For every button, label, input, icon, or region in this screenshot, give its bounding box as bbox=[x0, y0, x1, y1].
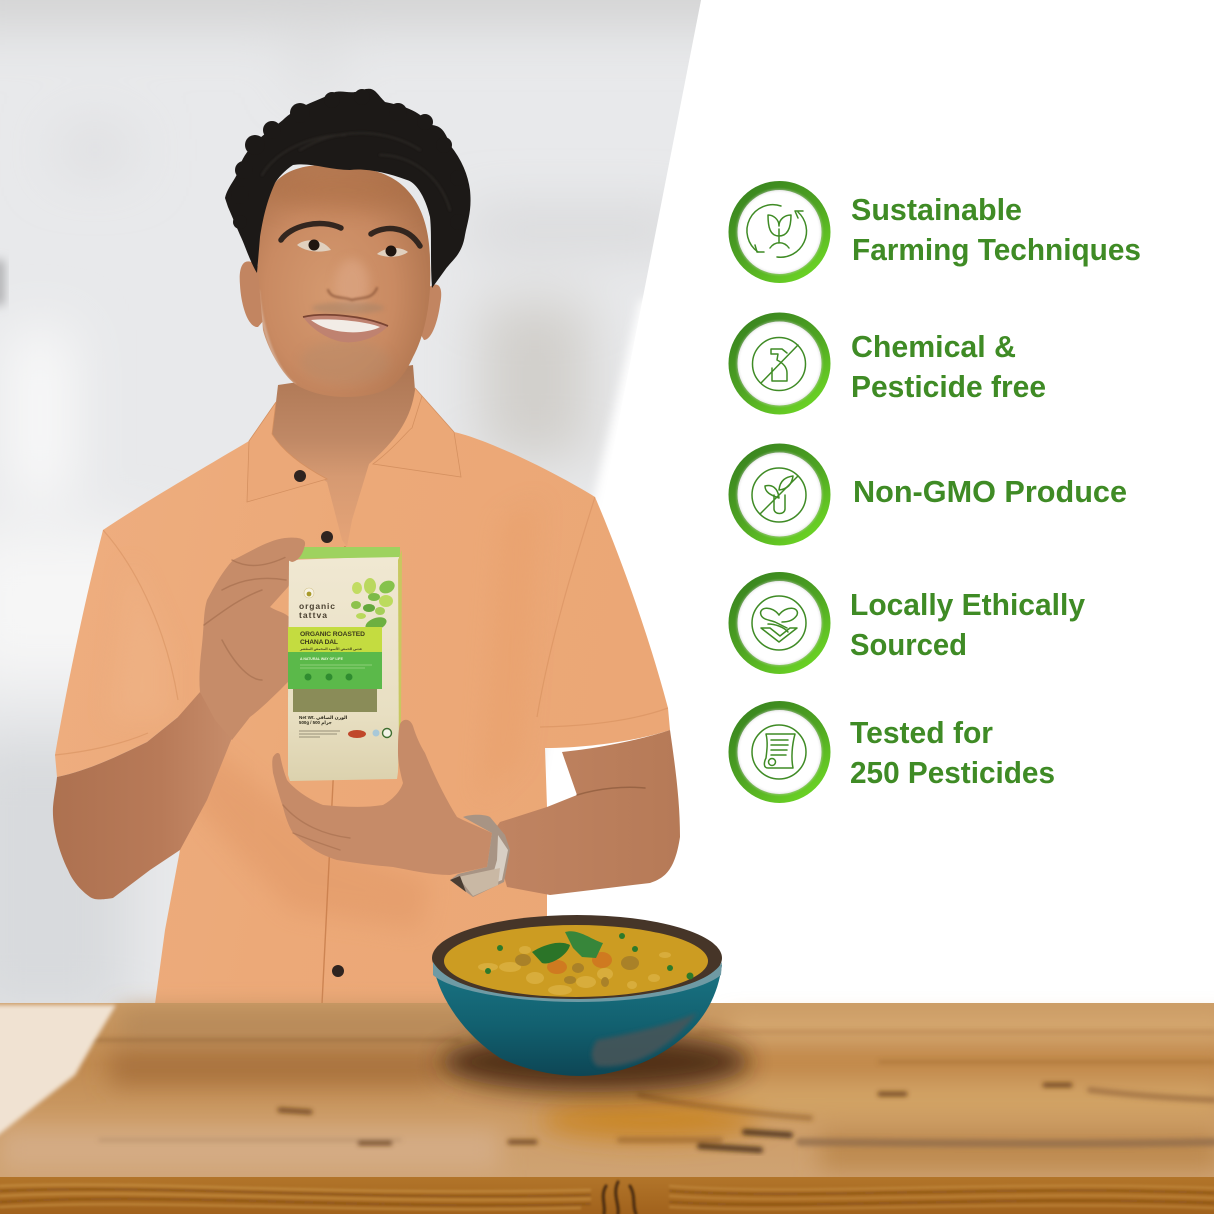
collar and placket buttons bbox=[294, 470, 344, 977]
coriander garnish bbox=[485, 931, 694, 980]
lentils bbox=[478, 946, 671, 995]
dal bowl bbox=[432, 915, 750, 1092]
green tagline band bbox=[288, 652, 382, 689]
product package: Organic Tattva Roasted Chana Dal bbox=[288, 547, 402, 781]
title band: عدس الحمص الأسود المحمص المقشر bbox=[299, 646, 362, 651]
label: Tested for bbox=[850, 715, 993, 750]
net weight text bbox=[299, 715, 348, 737]
table bright patch bbox=[0, 1005, 116, 1140]
title band: ORGANIC ROASTED bbox=[300, 631, 365, 638]
ears bbox=[240, 261, 441, 340]
wrist watch bbox=[450, 815, 510, 897]
label: Locally Ethically bbox=[850, 587, 1086, 622]
hair bbox=[225, 89, 471, 288]
photo background: blurred kitchen bbox=[0, 0, 780, 1020]
window showing dal bbox=[293, 689, 377, 712]
brand logo: tattva bbox=[299, 610, 327, 620]
hand creases bbox=[204, 556, 288, 680]
leaf cluster bbox=[351, 578, 397, 633]
white right panel bbox=[500, 0, 1214, 1010]
left hand fingertip bbox=[278, 538, 305, 562]
table front edge bbox=[0, 1177, 1214, 1214]
eyebrows bbox=[281, 224, 420, 246]
neck and open placket bbox=[272, 365, 415, 547]
carrot pieces bbox=[547, 952, 612, 974]
pouch bbox=[288, 556, 400, 781]
green top strip bbox=[292, 547, 400, 559]
bowl body bbox=[433, 965, 722, 1076]
title band: CHANA DAL bbox=[300, 639, 338, 646]
hand creases bbox=[283, 805, 350, 850]
elbow crease bbox=[577, 787, 645, 795]
label: Sustainable bbox=[851, 192, 1022, 227]
label: Chemical & bbox=[851, 329, 1016, 364]
label line 2: Pesticide free bbox=[851, 369, 1046, 404]
ring badge with certificate icon bbox=[733, 706, 826, 798]
bowl rim bbox=[432, 915, 722, 1001]
left collar bbox=[247, 402, 327, 502]
side gusset bbox=[398, 550, 402, 770]
face shading bbox=[258, 170, 425, 385]
benefit: sustainable farming techniques bbox=[733, 186, 1141, 278]
person holding the product bbox=[53, 89, 670, 1004]
wooden table bbox=[0, 1003, 1214, 1214]
ring badge with crossed test tube plant icon bbox=[733, 448, 826, 541]
edge grain bbox=[0, 1185, 1214, 1209]
brand logo bbox=[299, 588, 335, 620]
shirt shading and seams bbox=[55, 497, 668, 1004]
wood grain bbox=[80, 1032, 1214, 1150]
right cupped hand bbox=[272, 720, 492, 875]
bowl shadow bbox=[440, 1032, 750, 1092]
bowl worn patch bbox=[592, 1013, 697, 1067]
fingers over the package and lower arm and hand bbox=[272, 538, 680, 897]
benefit: tested for 250 pesticides bbox=[733, 706, 1055, 798]
dal surface bbox=[444, 925, 708, 997]
net weight text: 500g / 500 جرام bbox=[299, 720, 332, 725]
ring badge with plant cycle icon bbox=[733, 186, 826, 278]
edge knot bbox=[603, 1182, 636, 1214]
eyes bbox=[297, 240, 408, 257]
label: Non-GMO Produce bbox=[853, 474, 1127, 509]
green tagline band: A NATURAL WAY OF LIFE bbox=[300, 657, 344, 661]
benefit: locally ethically sourced bbox=[733, 576, 1086, 670]
face bbox=[258, 165, 430, 397]
label line 2: Farming Techniques bbox=[852, 232, 1141, 267]
title band bbox=[288, 627, 382, 652]
benefit: non-gmo produce bbox=[733, 448, 1127, 541]
ring badge with heart hands icon bbox=[733, 576, 826, 670]
brand logo: organic bbox=[299, 601, 335, 611]
product badges bbox=[348, 728, 392, 738]
label line 2: Sourced bbox=[850, 627, 967, 662]
nose bbox=[328, 288, 377, 300]
table tones bbox=[0, 1010, 1214, 1170]
benefit: chemical and pesticide free bbox=[733, 317, 1046, 410]
net weight text: Net Wt. الوزن الصافي bbox=[299, 715, 348, 720]
benefits list bbox=[733, 186, 1141, 798]
right collar bbox=[373, 388, 461, 477]
shirt bbox=[55, 388, 670, 1004]
mouth and smile bbox=[303, 315, 388, 342]
right arm bbox=[492, 730, 680, 895]
ring badge with crossed spray bottle icon bbox=[733, 317, 826, 410]
label line 2: 250 Pesticides bbox=[850, 755, 1055, 790]
left arm and hand bbox=[53, 538, 305, 899]
